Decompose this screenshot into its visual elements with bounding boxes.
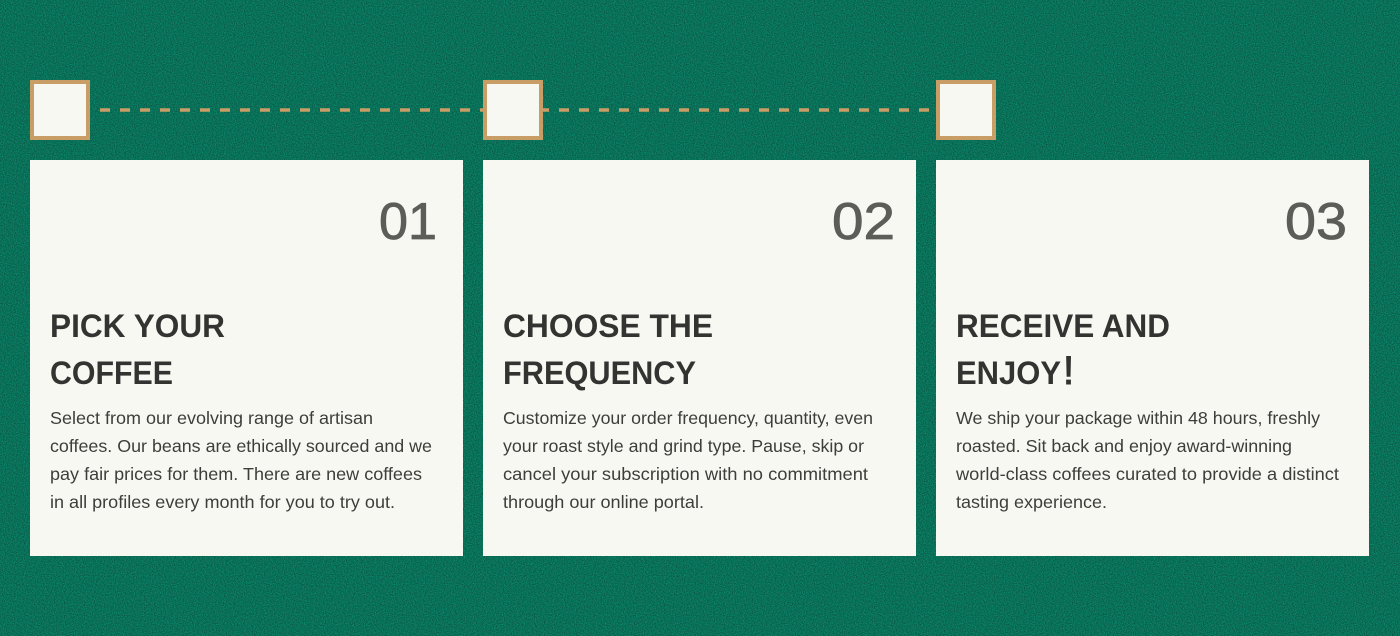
step number 03: 03 [1285,193,1347,251]
body text: step 1 description: pay fair prices for them. There are new coffees [50,464,422,484]
panel: step 1 pick your coffee [30,160,463,556]
body text: step 3 description: world-class coffees curated to provide a distinct [955,464,1339,484]
body text: step 2 description: Customize your order frequency, quantity, even [503,408,873,428]
panel: step 3 receive and enjoy [936,160,1369,556]
connector: dashed line from step 2 to step 3 [539,108,930,112]
icon box: step 2 [485,82,541,138]
heading: pick your coffee: PICK YOUR [50,308,225,344]
step number 02: 02 [832,193,895,251]
heading: pick your coffee: COFFEE [50,355,173,391]
heading: pick your coffee [50,308,225,391]
heading: receive and enjoy: RECEIVE AND [956,308,1170,344]
body text: step 1 description: coffees. Our beans are ethically sourced and we [50,436,432,456]
connector: dashed line from step 1 to step 2 [100,108,483,112]
body text: step 3 description: roasted. Sit back and enjoy award-winning [956,436,1292,456]
body text: step 2 description [503,408,873,512]
body text: step 1 description [50,408,432,512]
icon box: step 3 [938,82,994,138]
body text: step 1 description: in all profiles every month for you to try out. [50,492,395,512]
body text: step 2 description: your roast style and grind type. Pause, skip or [503,436,864,456]
icon box: step 1 [32,82,88,138]
heading: receive and enjoy: ENJOY [956,355,1061,391]
heading: receive and enjoy [956,308,1170,393]
heading: choose the frequency: FREQUENCY [503,355,696,391]
heading: choose the frequency: CHOOSE THE [503,308,713,344]
step number 01: 01 [379,193,437,251]
body text: step 3 description: tasting experience. [956,492,1107,512]
body text: step 3 description: We ship your package within 48 hours, freshly [956,408,1320,428]
heading: choose the frequency [503,308,713,391]
body text: step 1 description: Select from our evolving range of artisan [50,408,373,428]
body text: step 3 description [955,408,1339,512]
panel: step 2 choose the frequency [483,160,916,556]
body text: step 2 description: cancel your subscription with no commitment [503,464,868,484]
heading: receive and enjoy: ! [1063,349,1074,393]
body text: step 2 description: through our online portal. [503,492,704,512]
